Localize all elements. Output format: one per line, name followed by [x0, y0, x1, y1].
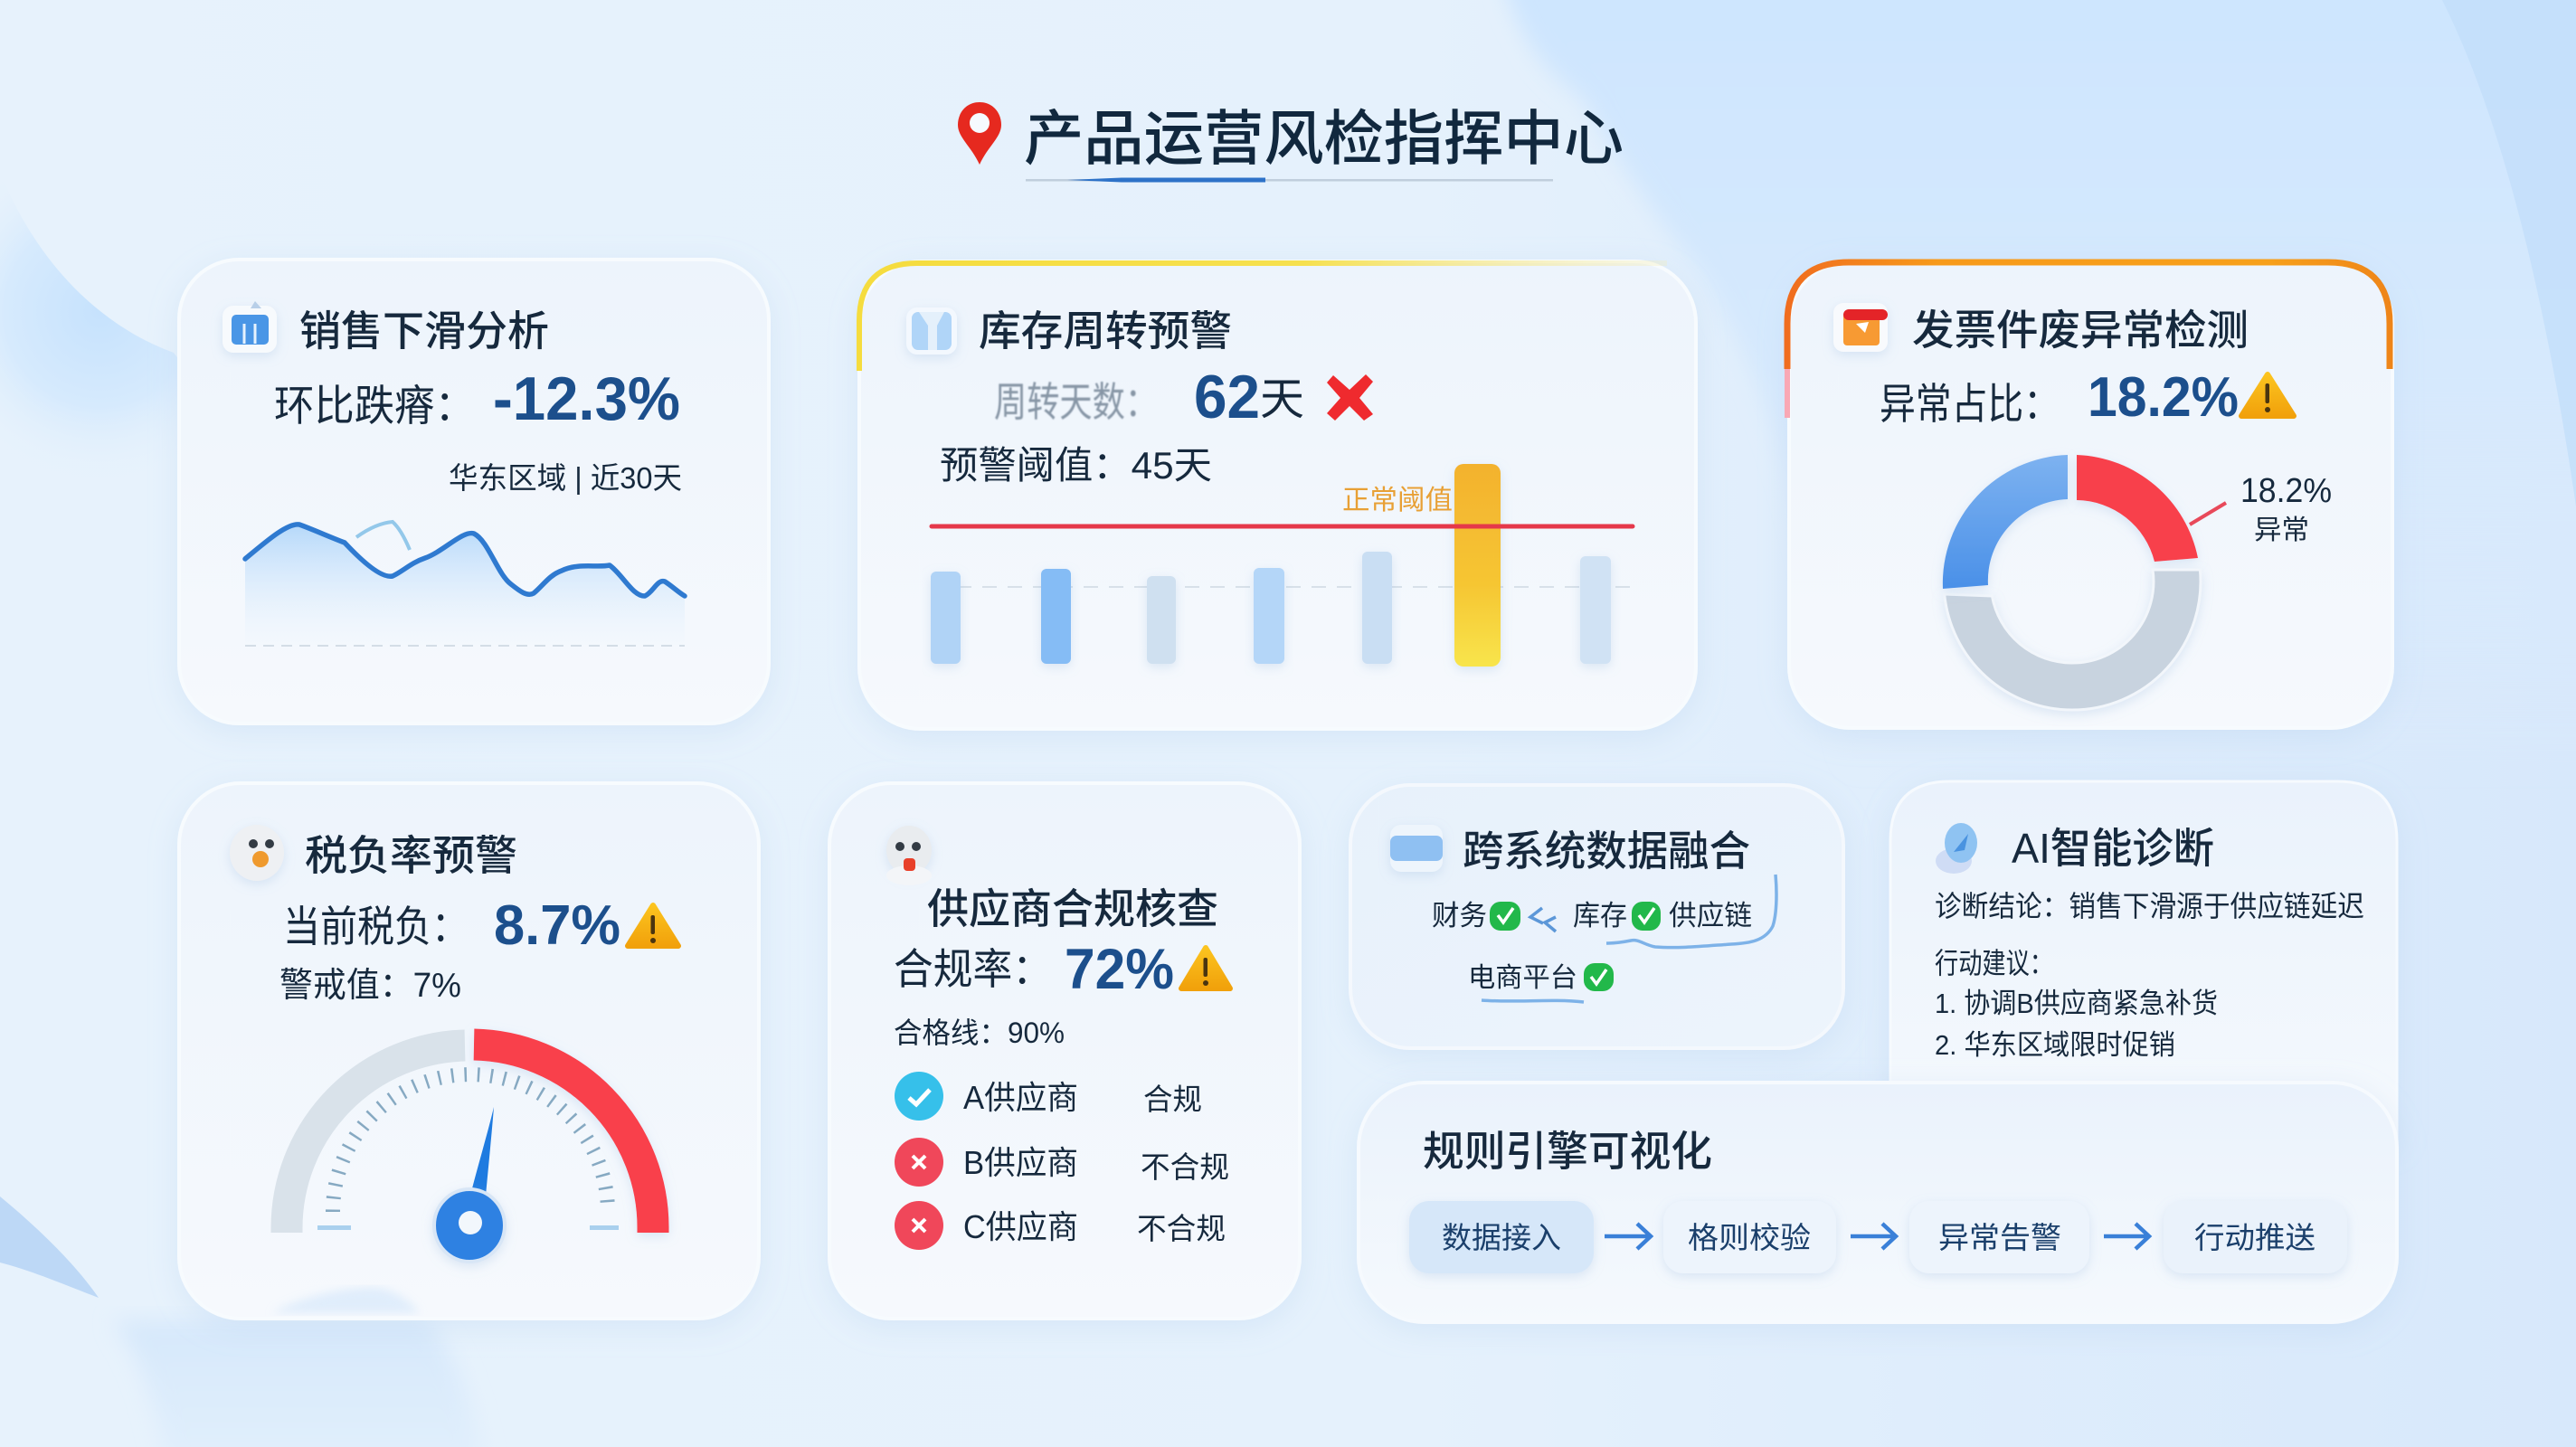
icon: warning — [1181, 948, 1230, 988]
metric label: 异常占比： — [1880, 380, 2060, 428]
supplier row A — [895, 1072, 1202, 1121]
gauge hub — [434, 1189, 505, 1262]
heading: 供应商合规核查 — [927, 885, 1218, 932]
icon: data — [1390, 825, 1443, 872]
heading: 规则引擎可视化 — [1423, 1128, 1712, 1175]
system status row: 库存 — [1573, 900, 1627, 932]
icon: sales — [223, 301, 277, 353]
metric value: 18.2% — [2088, 366, 2239, 429]
supplier row B — [895, 1138, 1229, 1187]
metric label: 当前税负： — [283, 903, 469, 950]
arrow — [1851, 1224, 1896, 1249]
title text: 产品运营风检指挥中心 — [1024, 105, 1624, 172]
conclusion: 诊断结论：销售下滑源于供应链延迟 — [1935, 890, 2364, 922]
pass line: 合格线：90% — [894, 1017, 1065, 1049]
icon: location pin — [958, 102, 1001, 165]
metric label: 周转天数： — [994, 379, 1158, 425]
step 3: 异常告警 — [1938, 1221, 2061, 1254]
line chart — [245, 522, 685, 646]
action 2: 2. 华东区域限时促销 — [1935, 1029, 2175, 1061]
arrow — [1605, 1224, 1651, 1249]
system status row — [1432, 900, 1752, 932]
metric value: 72% — [1065, 938, 1174, 1001]
panel: tax rate warning — [179, 783, 759, 1319]
heading: 库存周转预警 — [979, 307, 1232, 355]
threshold text: 预警阈值：45天 — [940, 444, 1212, 487]
icon: warning — [628, 905, 678, 946]
metric value: -12.3% — [493, 364, 680, 433]
step 4: 行动推送 — [2194, 1221, 2316, 1254]
bar chart — [931, 464, 1633, 667]
metric label: 合规率： — [894, 945, 1052, 993]
connection curve — [1606, 875, 1776, 948]
action 1: 1. 协调B供应商紧急补货 — [1935, 988, 2218, 1019]
metric value: 62 — [1194, 363, 1260, 431]
gauge needle — [470, 1107, 494, 1196]
threshold label: 正常阈值 — [1342, 486, 1453, 515]
donut leader — [2190, 503, 2226, 525]
region note: 华东区域 | 近30天 — [449, 461, 682, 495]
donut label: 异常 — [2254, 515, 2309, 545]
accent border orange — [1787, 262, 2390, 418]
title — [958, 102, 1624, 183]
icon: red cross — [1327, 374, 1373, 421]
step 3 — [1909, 1201, 2089, 1273]
supplier row C — [895, 1201, 1226, 1250]
arrow — [2104, 1224, 2149, 1249]
icon: inventory — [906, 307, 957, 355]
platform status: 电商平台 — [1468, 963, 1577, 993]
heading: 发票件废异常检测 — [1912, 307, 2249, 354]
supplier row C: C供应商 — [963, 1208, 1078, 1245]
icon: mascot — [886, 826, 932, 885]
icon: AI — [1936, 823, 1977, 874]
panel: supplier compliance — [829, 783, 1300, 1319]
step 2: 格则校验 — [1688, 1221, 1811, 1254]
donut chart — [1943, 455, 2332, 710]
supplier row A: A供应商 — [963, 1079, 1078, 1116]
step 1: 数据接入 — [1442, 1221, 1561, 1254]
supplier row B: B供应商 — [963, 1144, 1078, 1181]
heading: AI智能诊断 — [2012, 825, 2214, 872]
donut label value: 18.2% — [2240, 472, 2332, 510]
step 4 — [2164, 1201, 2347, 1273]
panel: invoice void anomaly — [1787, 261, 2392, 728]
panel: inventory turnover — [859, 261, 1696, 729]
warning value: 警戒值：7% — [279, 967, 461, 1005]
panel: rule engine — [1359, 1083, 2397, 1322]
step 2 — [1663, 1201, 1836, 1273]
panel: cross-system data fusion — [1350, 785, 1843, 1048]
heading: 税负率预警 — [305, 832, 517, 879]
platform status — [1468, 963, 1614, 1002]
panel: sales decline — [179, 260, 769, 724]
heading: 跨系统数据融合 — [1463, 828, 1750, 875]
system status row: 财务 — [1432, 900, 1487, 932]
system status row: 供应链 — [1669, 900, 1752, 932]
heading: 销售下滑分析 — [299, 307, 549, 355]
gauge — [287, 1045, 653, 1262]
icon: invoice — [1833, 303, 1888, 352]
panel: AI diagnosis — [1890, 781, 2397, 1140]
icon: warning — [2241, 374, 2294, 416]
metric unit: 天 — [1260, 375, 1304, 424]
icon: mascot — [230, 825, 284, 881]
supplier row C: 不合规 — [1137, 1212, 1226, 1245]
step 1 — [1409, 1201, 1594, 1273]
title underline — [1026, 177, 1553, 183]
supplier row A: 合规 — [1143, 1083, 1202, 1116]
accent border yellow — [859, 263, 1667, 371]
metric label: 环比跌瘠： — [274, 382, 475, 430]
actions heading: 行动建议： — [1935, 947, 2053, 979]
metric value: 8.7% — [494, 894, 620, 957]
supplier row B: 不合规 — [1141, 1150, 1229, 1184]
